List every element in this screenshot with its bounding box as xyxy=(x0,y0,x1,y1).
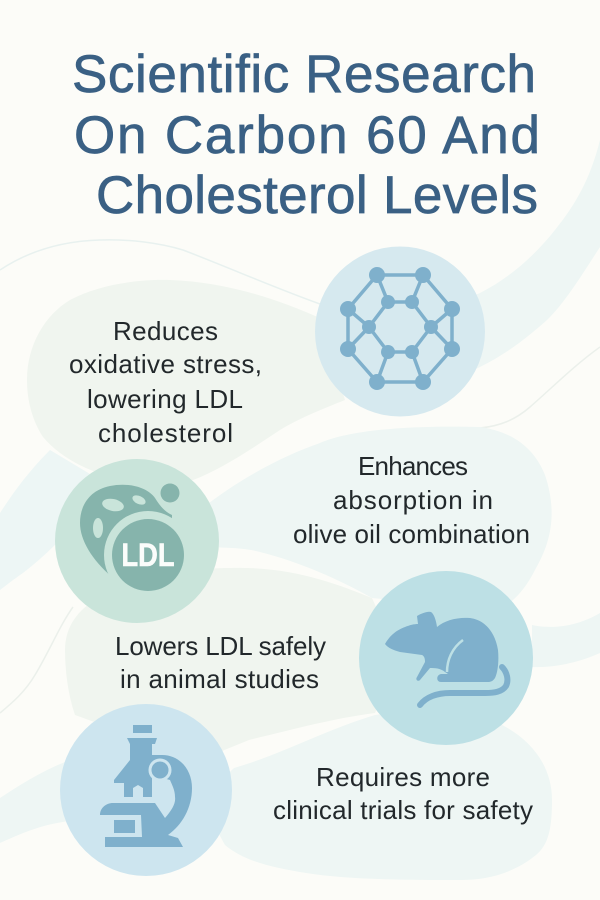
text: reduces oxidative stress: cholesterol xyxy=(98,418,233,448)
blob: lowers LDL safely xyxy=(65,568,400,760)
background flowing bands xyxy=(0,140,600,843)
icon: microscope xyxy=(60,704,232,876)
title: Cholesterol Levels xyxy=(96,166,538,225)
title xyxy=(72,45,540,225)
text: requires more clinical trials: Requires more xyxy=(316,762,490,792)
text: requires more clinical trials xyxy=(273,762,533,825)
icon: mouse xyxy=(359,571,533,745)
icon: carbon 60 molecule xyxy=(315,246,485,416)
icon: LDL particle xyxy=(55,459,219,623)
text: lowers LDL safely: in animal studies xyxy=(120,664,319,694)
text: lowers LDL safely xyxy=(115,631,326,694)
text: reduces oxidative stress: lowering LDL xyxy=(87,384,243,414)
title: Scientific Research xyxy=(72,45,536,104)
text: enhances absorption: Enhances xyxy=(358,451,468,481)
text: requires more clinical trials: clinical trials for safety xyxy=(273,795,533,825)
text: reduces oxidative stress: Reduces xyxy=(113,316,218,346)
text: enhances absorption: olive oil combination xyxy=(293,519,530,549)
text: enhances absorption: absorption in xyxy=(333,485,493,515)
text: reduces oxidative stress: oxidative stress, xyxy=(69,349,262,379)
blob: reduces oxidative stress xyxy=(27,280,345,483)
title: On Carbon 60 And xyxy=(74,106,540,165)
text: reduces oxidative stress xyxy=(69,316,262,448)
text: enhances absorption xyxy=(293,451,530,549)
text: lowers LDL safely: Lowers LDL safely xyxy=(115,631,326,661)
blob: enhances absorption xyxy=(200,427,552,610)
blob: requires more trials xyxy=(200,710,552,880)
label: LDL: LDL xyxy=(122,537,174,573)
